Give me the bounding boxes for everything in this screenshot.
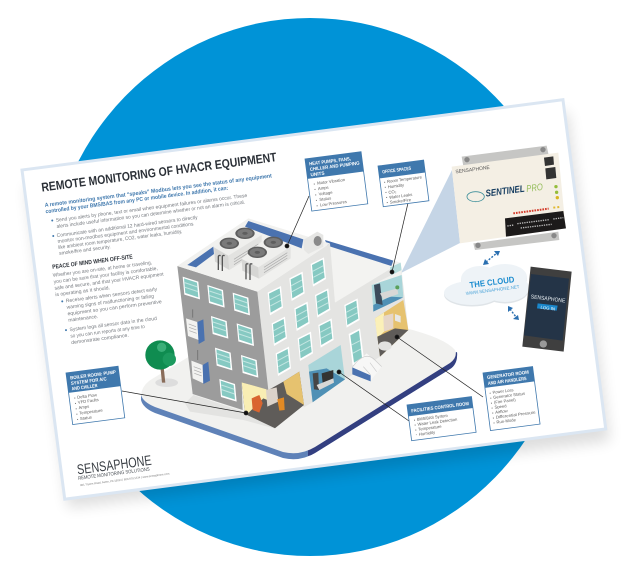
Sensaphone logo: [76, 450, 170, 487]
callout: boiler room: Amps: [78, 404, 90, 410]
cone from building to device: [401, 170, 460, 273]
off-site bullets: demonstrate compliance.: [71, 333, 129, 346]
windows right face: [268, 257, 364, 376]
callout: heat pumps: Amps: [318, 185, 329, 191]
capability bullets: like ambient room temperature, CO2, water leaks, humidity,: [58, 229, 183, 251]
callout: facilities control room: Temperature: [418, 424, 443, 432]
callout: generator room: Speed: [494, 403, 508, 410]
off-site bullets: so you can run reports at any time to: [70, 324, 145, 340]
callout: generator room: Generator Status: [493, 391, 525, 400]
off-site bullets: warning signs of malfunctioning or failing: [66, 294, 155, 311]
rooftop unit: [303, 232, 323, 254]
windows left face: [183, 277, 258, 402]
callout: generator room: GENERATOR ROOM: [487, 370, 529, 381]
wing roof: [328, 242, 401, 303]
paper shadow: [26, 112, 610, 508]
main and wing front faces: [257, 243, 408, 407]
intro text: A remote monitoring system that “speaks” Modbus lets you see the status of any equipment: [44, 173, 272, 209]
callout: generator room: Airflow: [495, 408, 509, 415]
title: REMOTE MONITORING OF HVACR EQUIPMENT: [41, 150, 278, 195]
off-site bullets: System logs all sensor data in the cloud: [69, 316, 157, 333]
cloud: THE CLOUD: [469, 274, 515, 290]
callout: generator room: Differential Pressure: [495, 409, 536, 420]
callout: office spaces: Room Temperature: [387, 174, 423, 184]
capability bullets: alerts include useful information so you can determine whether or not an alarm is critical.: [56, 200, 245, 230]
callout: office spaces: [378, 160, 429, 207]
callout: facilities control room: BMS/BAS System: [417, 413, 448, 422]
off-site bullets: maintenance.: [68, 314, 99, 324]
capability bullets: [50, 193, 252, 257]
callout: heat pumps: CHILLER AND PUMPING: [310, 161, 360, 173]
callout: generator room: (Fire Panel): [494, 397, 516, 405]
control room: [308, 345, 345, 402]
callout: heat pumps: UNITS: [310, 171, 326, 178]
off-site paragraph: Whether you are on-site, at home or traveling,: [53, 260, 152, 279]
platform base: [141, 328, 457, 459]
callout: generator room: Run-Mode: [496, 417, 517, 425]
capability bullets: Send you alerts by phone, text or email when equipment failures or alarms occur. These: [55, 193, 248, 224]
callout: boiler room: SYSTEM FOR A/C: [71, 376, 107, 387]
leader lines: [122, 196, 483, 421]
callout: office spaces: Smoke/Fire: [389, 197, 412, 205]
off-site paragraph: is operating as it should.: [55, 285, 110, 298]
off-site paragraph: [53, 259, 165, 298]
poster sheet: [22, 100, 606, 499]
roof: [177, 218, 330, 292]
callout: heat pumps: Status: [319, 195, 331, 202]
callout: boiler room: VFD Faults: [78, 397, 99, 405]
callout: facilities control room: Water Leak Detection: [417, 417, 458, 427]
callout: boiler room: BOILER ROOM: PUMP: [70, 370, 117, 381]
building: [177, 218, 408, 429]
callout: heat pumps: [305, 152, 368, 211]
wall units: [186, 309, 210, 384]
off-site bullets: Receive alerts when sensors detect early: [66, 287, 158, 304]
Sentinel Pro device: [452, 146, 566, 250]
subheading: PEACE OF MIND WHEN OFF-SITE: [52, 254, 133, 271]
callout: boiler room: Delta Flow: [77, 392, 98, 400]
callout: boiler room: AND CHILLER: [71, 383, 98, 392]
callout: boiler room: Status: [80, 415, 92, 421]
Sensaphone logo: 901 Tryens Road, Aston, PA 19014 | 800.979.1334 | www.sensaphone.com: [80, 471, 170, 487]
callout: heat pumps: Voltage: [318, 190, 333, 197]
capability bullets: Communicate with an additional 12 hard-wired sensors to directly: [56, 215, 198, 239]
Sensaphone logo: REMOTE MONITORING SOLUTIONS: [78, 467, 151, 482]
arrow: cloud to phone: [508, 306, 519, 320]
callout: heat pumps: Motor Vibration: [317, 177, 346, 186]
office room: [372, 263, 403, 312]
blue circle background: [48, 18, 572, 556]
callout: office spaces: CO₂: [388, 189, 397, 195]
generator room: [375, 300, 408, 357]
Sentinel Pro device: PRO: [526, 182, 544, 195]
callout: heat pumps: Low Pressures: [320, 199, 347, 207]
arrow: device to cloud: [483, 251, 500, 265]
Sensaphone logo: SENSAPHONE: [76, 452, 152, 477]
callout: generator room: AND AIR HANDLERS: [488, 376, 528, 387]
off-site paragraph: you can be sure that your facility is comfortable,: [53, 266, 158, 285]
AC units: [214, 228, 291, 280]
callout: office spaces: OFFICE SPACES: [382, 166, 412, 175]
off-site bullets: equipment so you can perform preventive: [67, 299, 162, 317]
left face: [177, 266, 268, 410]
Sentinel Pro device: SENTINEL: [485, 184, 525, 200]
intro text: controlled by your BMS/BAS from any PC or mobile device. In addition, it can:: [45, 186, 229, 215]
callout: boiler room: Temperature: [79, 408, 104, 416]
off-site bullets: [61, 286, 166, 347]
callout: facilities control room: Humidity: [419, 430, 436, 437]
callout: generator room: [483, 367, 540, 431]
cloud: [444, 264, 529, 306]
Sentinel Pro device: SENSAPHONE: [455, 165, 491, 175]
porch stairs: [352, 353, 382, 381]
callout: office spaces: Humidity: [387, 182, 405, 189]
smartphone: SENSAPHONE: [530, 294, 566, 305]
tree: [145, 340, 178, 387]
callout: facilities control room: [407, 397, 476, 441]
callout: boiler room: [66, 366, 125, 425]
capability bullets: monitor non-modbus equipment and environmental conditions: [57, 221, 194, 245]
off-site paragraph: safe and secure, and that your HVACR equipment: [54, 272, 165, 292]
callout: heat pumps: HEAT PUMPS, FANS,: [309, 156, 352, 167]
callout: generator room: Power Loss: [492, 387, 514, 395]
smartphone: [522, 267, 572, 352]
cloud: WWW.SENSAPHONE.NET: [465, 284, 520, 296]
callout: office spaces: Water Leaks: [389, 192, 413, 200]
boiler room: [242, 372, 304, 428]
ground shadow: [185, 395, 275, 429]
smartphone: LOG IN: [540, 305, 555, 311]
capability bullets: smoke/fire and security.: [59, 244, 111, 257]
callout: facilities control room: FACILITIES CONTROL ROOM: [411, 401, 469, 414]
